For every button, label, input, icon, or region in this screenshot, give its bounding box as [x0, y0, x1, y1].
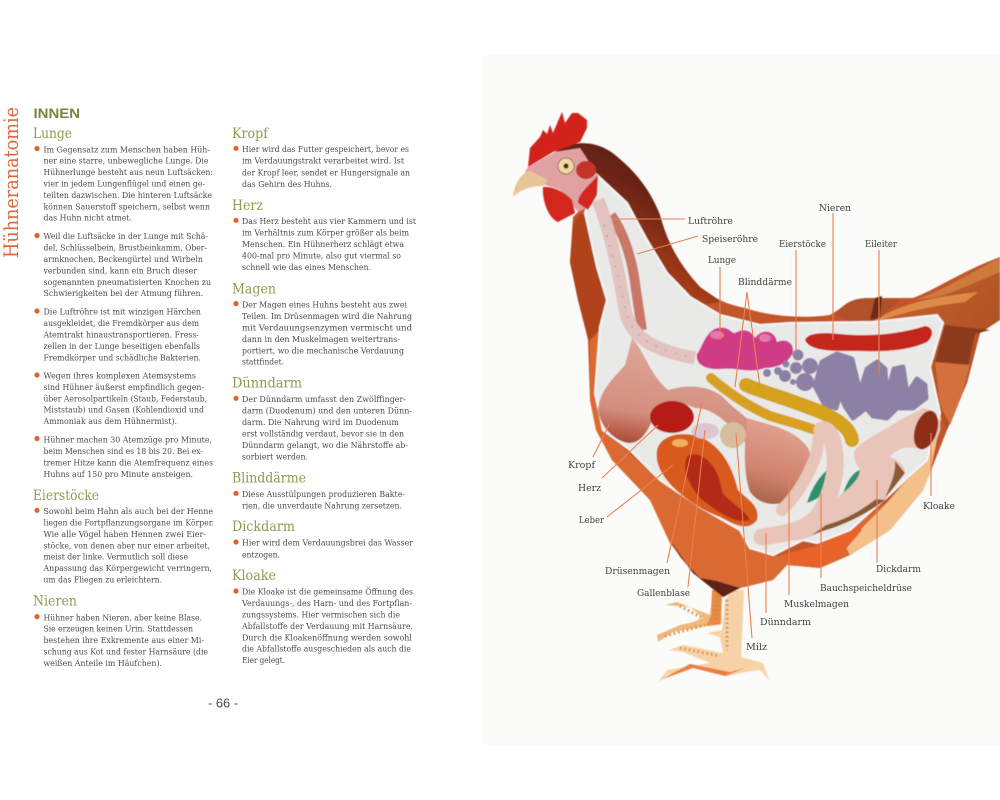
text block: Herz: im Verhältnis zum Körper größer als beim	[242, 228, 409, 238]
text block: Lunge: Fremdkörper und schädliche Bakterien.	[44, 354, 201, 364]
text block: Kloake: zungssystems. Hier vermischen sich die	[242, 610, 400, 620]
text block: Lunge	[33, 126, 213, 480]
text block: Blinddärme: rien, die unverdaute Nahrung zersetzen.	[242, 502, 402, 512]
text block: Lunge: das Huhn nicht atmet.	[44, 214, 132, 224]
text block: Magen: dann in den Muskelmagen weitertrans-	[242, 335, 400, 345]
body cavity	[585, 175, 943, 555]
organ labels: Eileiter	[865, 239, 897, 250]
text block: Eierstöcke: Wie alle Vögel haben Hennen zwei Eier-	[44, 530, 206, 540]
text block: Kloake: Eier gelegt.	[242, 656, 285, 666]
text block: Lunge: zellen in der Lunge beseitigen ebenfalls	[44, 342, 200, 352]
text block: Magen: mit Verdauungsenzymen vermischt und	[242, 323, 413, 333]
organ labels: Drüsenmagen	[605, 566, 670, 577]
text block: Magen: stattfindet.	[242, 358, 284, 368]
text block: Lunge: über Aerosolpartikeln (Staub, Federstaub,	[44, 393, 207, 404]
text block: Lunge: teilten dazwischen. Die hinteren Luftsäcke	[44, 191, 212, 201]
text block: Lunge: Lunge	[33, 126, 72, 142]
text block: Dünndarm: Der Dünndarm umfasst den Zwölffinger-	[242, 395, 406, 405]
organ labels: Bauchspeicheldrüse	[820, 583, 912, 594]
text block: Herz: Menschen. Ein Hühnerherz schlägt etwa	[242, 240, 404, 250]
text block: Eierstöcke: Anpassung das Körpergewicht verringern,	[43, 564, 212, 574]
cloaca	[909, 408, 943, 452]
organ labels: Dünndarm	[760, 617, 811, 628]
trachea	[598, 200, 695, 358]
text block: Kloake	[232, 568, 413, 666]
illustration: chicken anatomy	[513, 112, 1000, 684]
text block: Dünndarm: sorbiert werden.	[242, 453, 308, 463]
text block: Lunge: beim Menschen sind es 18 bis 20. Bei ex-	[44, 447, 203, 457]
text block: Lunge: del, Schlüsselbein, Brustbeinkamm, Ober-	[44, 244, 207, 254]
text block: Magen: Teilen. Im Drüsenmagen wird die Nahrung	[242, 312, 413, 322]
eye	[558, 158, 574, 174]
text block: Lunge: armknochen, Beckengürtel und Wirbeln	[44, 255, 203, 265]
ear lobe	[578, 175, 598, 210]
text block: Nieren: Sie erzeugen keinen Urin. Stattdessen	[44, 625, 193, 635]
text block: Blinddärme: Blinddärme	[232, 470, 306, 486]
organ labels: Herz	[578, 483, 601, 494]
organ labels: Kloake	[923, 501, 955, 512]
page number: - 66 -	[208, 696, 238, 710]
organ labels: Leber	[579, 515, 604, 526]
text block: Nieren: weißen Anteile im Häufchen).	[44, 658, 162, 669]
tail feathers	[835, 258, 1000, 430]
comb	[528, 112, 587, 167]
text block: Kropf: das Gehirn des Huhns.	[242, 180, 332, 190]
text block: Kloake: Kloake	[232, 568, 276, 584]
text block: Kloake: Verdauungs-, des Harn- und des Fortpflan-	[241, 599, 412, 609]
text block: Magen: Der Magen eines Huhns besteht aus zwei	[242, 300, 407, 310]
text block: Blinddärme	[232, 470, 405, 512]
neck feathers	[555, 143, 722, 305]
text block: Lunge: Wegen ihres komplexen Atemsystems	[44, 372, 196, 382]
panel: illustration background	[483, 55, 1000, 745]
text block: Lunge: Hühner machen 30 Atemzüge pro Minute,	[44, 435, 212, 445]
text block: Nieren	[33, 594, 208, 669]
organ labels: Blinddärme	[738, 277, 792, 288]
pale under-tail fluff	[845, 400, 945, 555]
spleen	[720, 422, 746, 448]
text block: Dünndarm: erst vollständig verdaut, bevor sie in den	[242, 430, 404, 440]
legs and feet	[657, 590, 769, 684]
text block: Lunge: Ammoniak aus dem Hühnermist).	[43, 416, 177, 427]
text block: Nieren: Hühner haben Nieren, aber keine Blase.	[44, 613, 202, 623]
ceca	[711, 378, 852, 440]
text block: Lunge: sogenannten pneumatisierten Knochen zu	[44, 278, 211, 288]
face	[525, 148, 598, 212]
crop and proventriculus	[598, 338, 752, 450]
text block: Kloake: Die Kloake ist die gemeinsame Öffnung des	[242, 586, 413, 598]
organ labels: Luftröhre	[688, 216, 733, 227]
text block: Dickdarm: Hier wird dem Verdauungsbrei das Wasser	[242, 539, 414, 549]
leader lines	[593, 213, 931, 638]
text block: Lunge: Huhns auf 150 pro Minute ansteigen.	[44, 470, 193, 480]
text block: Lunge: Die Luftröhre ist mit winzigen Härchen	[44, 308, 201, 318]
text block: Lunge: verbunden sind, kann ein Bruch dieser	[43, 266, 198, 276]
text block: Kropf	[232, 126, 410, 190]
text block: Lunge: Im Gegensatz zum Menschen haben Hüh-	[44, 145, 210, 155]
small intestine	[762, 428, 835, 537]
text block: Lunge: sind Hühner äußerst empfindlich gegen-	[44, 383, 204, 393]
text block: Lunge: Miststaub) und Gasen (Kohlendioxid und	[44, 405, 205, 416]
text block: Lunge: ausgekleidet, die Fremdkörper aus dem	[44, 319, 199, 329]
organ labels	[568, 203, 955, 653]
esophagus	[611, 215, 642, 330]
text block: Lunge: vier in jedem Lungenflügel und einen ge-	[43, 180, 205, 190]
text block: Lunge: Atemtrakt hinaustransportieren. Fress-	[43, 331, 199, 341]
text block: Nieren: Nieren	[33, 594, 77, 610]
text block: Dünndarm: darm. Die Nahrung wird im Duodenum	[242, 418, 399, 428]
text block: Eierstöcke: stöcke, von denen aber nur einer arbeitet,	[44, 541, 210, 551]
text block: Eierstöcke: meist der linke. Vermutlich soll diese	[44, 553, 188, 563]
text block: Dickdarm: Dickdarm	[232, 519, 295, 535]
text block: Eierstöcke: um das Fliegen zu erleichtern.	[44, 576, 162, 586]
kidney	[805, 326, 932, 351]
text block: Eierstöcke: Eierstöcke	[33, 488, 99, 504]
text block: Lunge: tremer Hitze kann die Atemfrequenz eines	[44, 458, 213, 468]
text block: Lunge: Weil die Luftsäcke in der Lunge mit Schä-	[44, 232, 208, 242]
pancreas	[807, 463, 860, 529]
ovaries	[763, 350, 818, 391]
lung	[697, 328, 793, 370]
wattle	[543, 187, 575, 222]
text block: Herz: 400-mal pro Minute, also gut viermal so	[242, 252, 401, 262]
text block: Dünndarm: Dünndarm	[232, 376, 302, 392]
organ labels: Nieren	[819, 203, 851, 214]
text block: Lunge: können Sauerstoff speichern, selbst wenn	[44, 202, 210, 212]
organ labels: Dickdarm	[876, 564, 921, 575]
front neck feathers	[570, 212, 612, 352]
organ labels: Speiseröhre	[702, 234, 758, 245]
organ labels: Gallenblase	[637, 588, 690, 599]
text block: Eierstöcke	[33, 488, 214, 586]
organ labels: Muskelmagen	[784, 599, 849, 610]
text block: Blinddärme: Diese Ausstülpungen produzieren Bakte-	[242, 490, 405, 500]
organ labels: Eierstöcke	[779, 239, 826, 250]
body plumage	[555, 143, 1000, 597]
text block: Nieren: bestehen ihre Exkremente aus einer Mi-	[44, 636, 204, 646]
heading: Innen: INNEN	[34, 105, 80, 121]
text block: Herz: Herz	[232, 198, 263, 214]
beak	[513, 171, 548, 197]
large intestine	[790, 408, 940, 540]
gizzard	[745, 418, 811, 504]
text block: Kloake: die Abfallstoffe ausgeschieden als auch die	[242, 645, 411, 655]
heart	[650, 401, 694, 433]
text block: Lunge: Hühnerlunge besteht aus neun Luftsäcken:	[44, 168, 213, 178]
belly feathers	[590, 330, 923, 597]
text block: Herz	[232, 198, 417, 273]
text block: Herz: schnell wie das eines Menschen.	[242, 263, 371, 273]
oviduct	[815, 354, 926, 418]
organ labels: Kropf	[568, 460, 596, 471]
thigh shadow	[670, 540, 740, 597]
liver	[657, 434, 757, 526]
text block: Kloake: Abfallstoffe der Verdauung mit Harnsäure.	[241, 622, 413, 632]
text block: Magen	[232, 282, 413, 368]
text block: Dickdarm: entzogen.	[242, 551, 280, 561]
text block: Dünndarm: Dünndarm gelangt, wo die Nährstoffe ab-	[242, 441, 408, 451]
text block: Kropf: im Verdauungstrakt verarbeitet wird. Ist	[242, 157, 405, 167]
organ labels: Milz	[746, 642, 767, 653]
organ labels: Lunge	[708, 255, 736, 266]
text block: Kropf: der Kropf leer, sendet er Hungersignale an	[242, 168, 410, 178]
text block: Lunge: Schwierigkeiten bei der Atmung führen.	[44, 289, 203, 299]
text block: Eierstöcke: liegen die Fortpflanzungsorgane im Körper.	[44, 518, 214, 528]
text block: Kropf: Hier wird das Futter gespeichert, bevor es	[242, 145, 409, 155]
text block: Magen: portiert, wo die mechanische Verdauung	[242, 346, 405, 356]
text block: Kropf: Kropf	[232, 126, 269, 142]
text block: Nieren: schung aus Kot und fester Harnsäure (die	[44, 646, 208, 658]
gallbladder	[691, 423, 719, 439]
text block: Dünndarm	[232, 376, 412, 463]
vertical title: Hühneranatomie	[0, 107, 23, 258]
text block: Dickdarm	[232, 519, 414, 561]
text block: Lunge: ner eine starre, unbewegliche Lunge. Die	[44, 157, 208, 167]
text block: Kloake: Durch die Kloakenöffnung werden sowohl	[242, 633, 412, 643]
text block: Herz: Das Herz besteht aus vier Kammern und ist	[242, 217, 417, 227]
text block: Magen: Magen	[232, 282, 276, 298]
text block: Eierstöcke: Sowohl beim Hahn als auch bei der Henne	[44, 507, 213, 517]
text block: Dünndarm: darm (Duodenum) und den unteren Dünn-	[242, 406, 412, 417]
